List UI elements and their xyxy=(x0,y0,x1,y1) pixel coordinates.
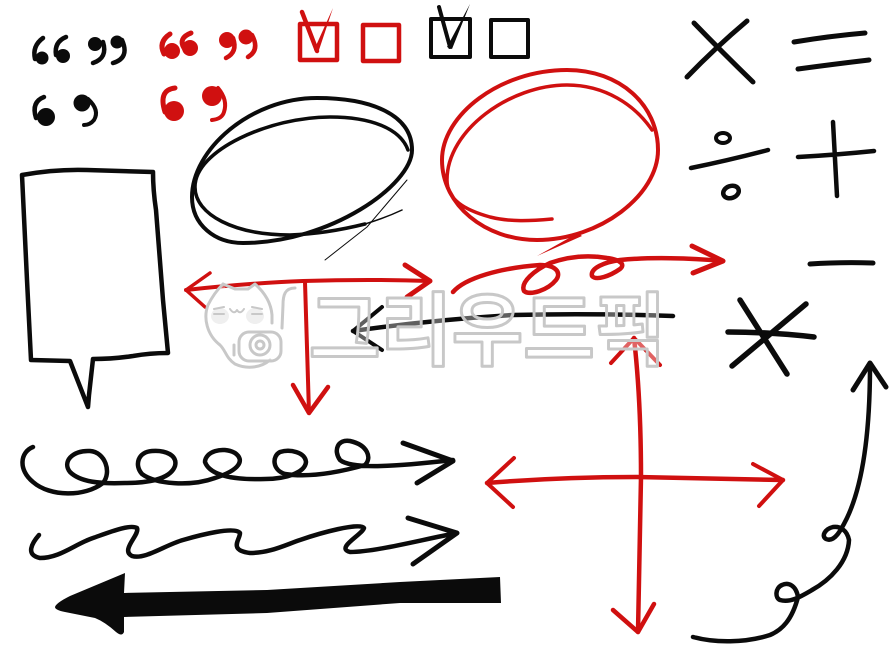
icon: black double quotation marks xyxy=(34,36,125,64)
icon: red checked box xyxy=(300,8,337,60)
icon: red single quotation marks xyxy=(163,86,225,121)
icon: divide sign xyxy=(691,133,768,200)
red T-shaped three-way arrow xyxy=(186,265,430,413)
icon: multiply sign xyxy=(687,21,753,82)
black curly up arrow xyxy=(693,363,886,641)
black looping arrow xyxy=(22,441,453,493)
icon: asterisk xyxy=(728,300,814,374)
icon: black empty box xyxy=(491,20,528,57)
red four-way cross arrow xyxy=(487,338,783,632)
thick black left arrow xyxy=(55,573,501,634)
icon: minus sign xyxy=(810,263,873,264)
icon: equals sign xyxy=(794,33,869,69)
watermark: cat logo xyxy=(206,284,295,367)
black scribbled ellipse xyxy=(192,98,412,260)
black squiggle arrow xyxy=(31,518,457,564)
red curly arrow xyxy=(453,246,723,293)
icon: black single quotation marks xyxy=(35,94,96,126)
watermark: brand wordmark: 그리우드픽 xyxy=(309,287,666,376)
speech bubble xyxy=(22,170,168,407)
icon: red double quotation marks xyxy=(162,30,255,59)
red scribbled circle xyxy=(442,70,658,256)
icon: black checked box xyxy=(431,4,470,57)
icon: red empty box xyxy=(363,25,399,61)
icon: plus sign xyxy=(798,122,874,196)
black left arrow xyxy=(353,307,673,350)
